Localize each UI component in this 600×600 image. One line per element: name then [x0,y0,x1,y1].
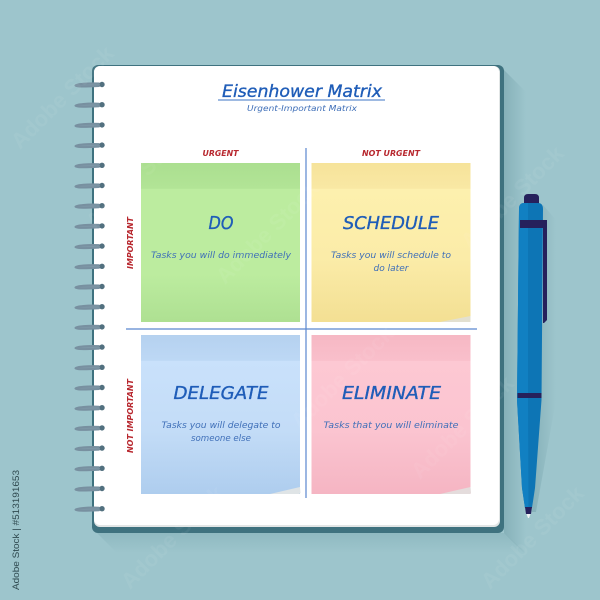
watermark: Adobe Stock [6,40,119,154]
heading: schedule: SCHEDULE [343,213,440,234]
text: schedule: do later [374,264,410,274]
notebook shadow [97,70,526,555]
watermark: Adobe Stock [476,480,589,594]
panel: do [141,163,300,322]
text: do: Tasks you will do immediately [151,251,292,261]
panel: schedule [312,163,470,322]
subtitle: Urgent-Important Matrix [247,104,357,113]
pen nib [525,507,532,514]
column label: urgent: URGENT [202,149,239,158]
spiral binding [76,82,105,511]
stock credit: Adobe Stock | #513191653 [11,470,22,590]
text: delegate: someone else [191,434,251,444]
text: delegate: Tasks you will delegate to [162,421,281,431]
text: schedule: Tasks you will schedule to [331,251,451,261]
notebook paper [94,66,500,527]
text: delegate [162,421,281,444]
watermark: Adobe Stock [406,370,519,484]
column label: not urgent: NOT URGENT [362,149,421,158]
pen shadow [532,205,556,512]
watermark: Adobe Stock [211,175,324,289]
panel: delegate [141,335,300,494]
pen clip [520,220,547,323]
heading: do: DO [208,213,234,234]
title: Eisenhower Matrix [222,82,383,102]
row label: important: IMPORTANT [126,216,135,269]
panel: eliminate [312,335,471,494]
row label: not important: NOT IMPORTANT [126,378,135,453]
watermark: Adobe Stock [286,320,399,434]
matrix axes [126,148,477,498]
watermark: Adobe Stock [81,120,194,234]
pen band [518,393,542,398]
notebook cover [92,65,504,533]
text: schedule [331,251,451,274]
watermark: Adobe Stock [116,480,229,594]
heading: delegate: DELEGATE [174,383,269,404]
text: eliminate: Tasks that you will eliminate [324,421,459,431]
heading: eliminate: ELIMINATE [342,383,442,404]
watermark: Adobe Stock [456,140,569,254]
pen body [517,203,543,508]
pen cap top [524,194,539,204]
icon: pen [517,194,547,518]
notebook [92,65,504,533]
